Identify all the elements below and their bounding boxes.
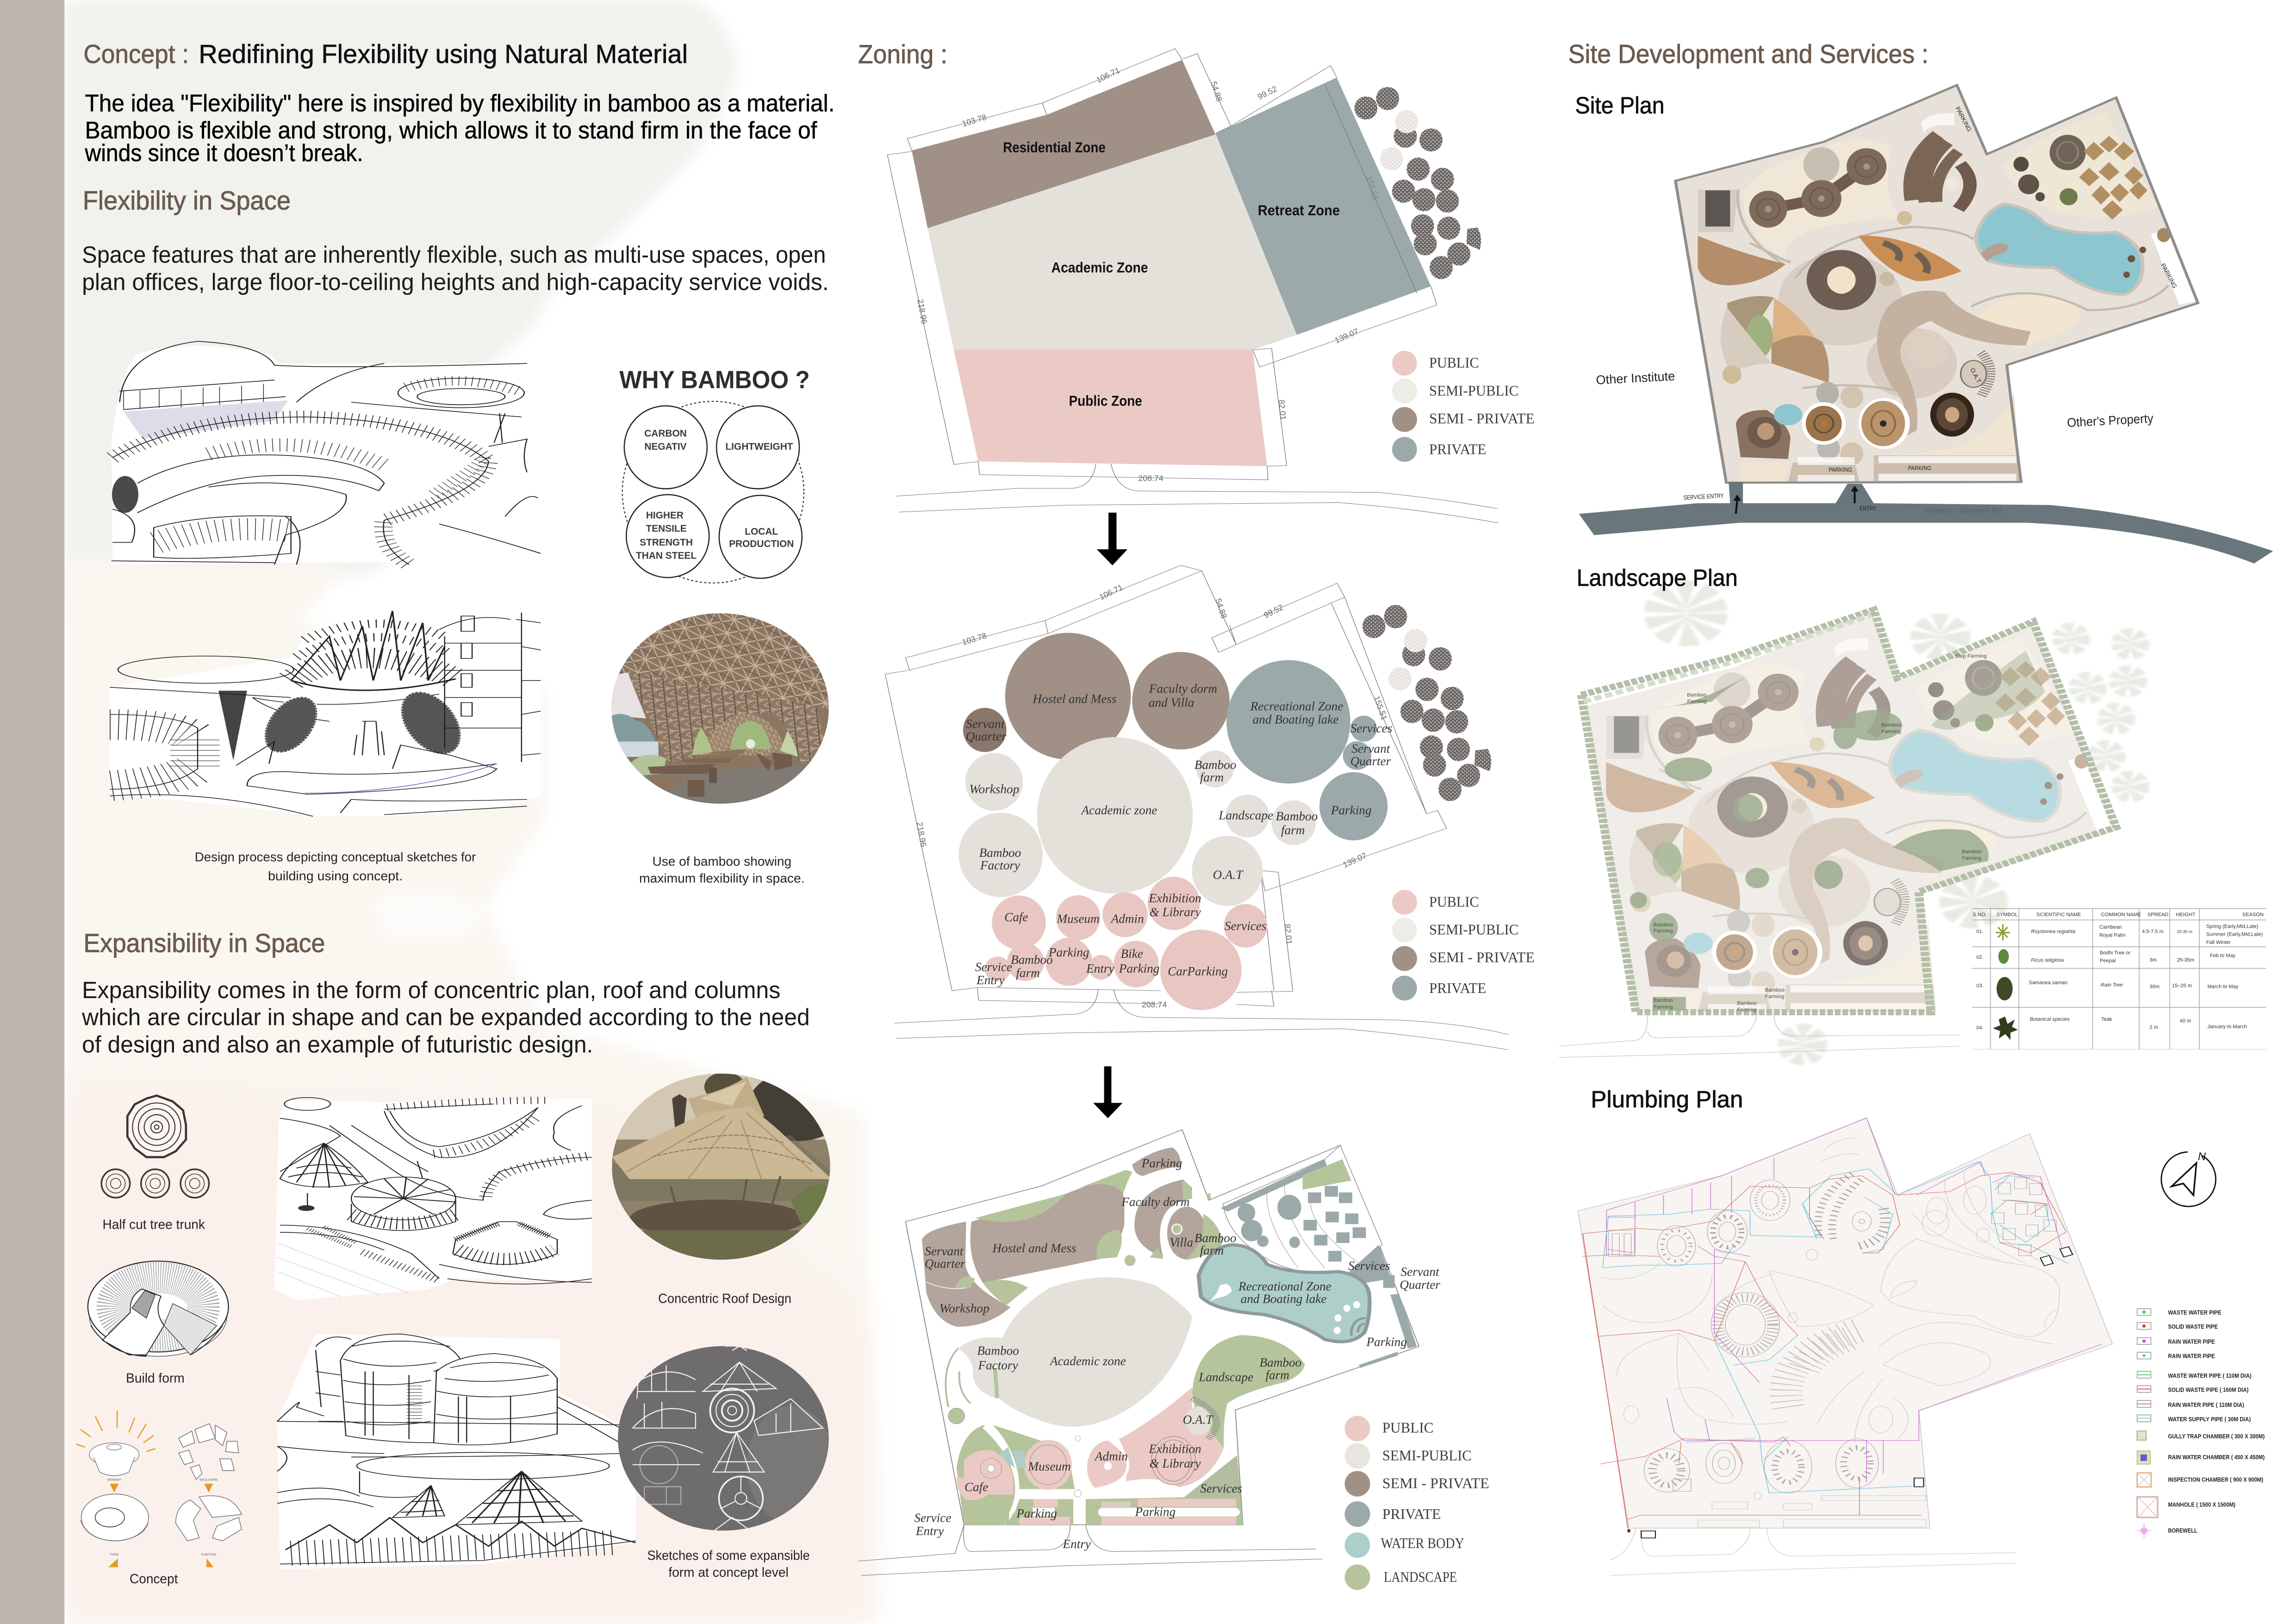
table: plant schedule: SEASON	[2242, 912, 2264, 918]
zoning plan 3: layout: & Library	[1150, 1456, 1201, 1470]
zoning plan 3: layout: Hostel and Mess	[992, 1241, 1076, 1255]
table: plant schedule: 04.	[1976, 1025, 1984, 1031]
legend: zoning 1	[1392, 351, 1535, 462]
zoning plan 3: layout: farm	[1200, 1243, 1224, 1257]
diagram: concept derivation: FUNCTION	[201, 1553, 217, 1556]
caption: concentric roof: Concentric Roof Design	[658, 1291, 791, 1306]
table: plant schedule: 25-35m	[2177, 957, 2194, 963]
table: plant schedule: 2 m	[2150, 1025, 2158, 1031]
zoning plan 2: bubble diagram: Parking	[1119, 962, 1159, 975]
zoning plan 3: layout: Services	[1348, 1259, 1390, 1273]
legend: plumbing: WASTE WATER PIPE	[2168, 1310, 2221, 1316]
text block: space features	[82, 242, 829, 295]
table: plant schedule: 01.	[1976, 929, 1984, 934]
text block: expansibility: which are circular in shape and can be expanded according to the need	[81, 1004, 810, 1031]
zoning plan 2: bubble diagram: 139.07	[1341, 851, 1368, 869]
text block: flexibility idea: The idea "Flexibility" here is inspired by flexibility in bamboo as a material.	[85, 90, 834, 117]
zoning plan 2: bubble diagram: Academic zone	[1081, 803, 1157, 817]
landscape plan: Farming	[1654, 1004, 1673, 1010]
legend: zoning 3: SEMI - PRIVATE	[1382, 1475, 1489, 1492]
table: plant schedule: SCIENTIFIC NAME	[2036, 912, 2081, 918]
heading: why bamboo: WHY BAMBOO ?	[619, 366, 810, 394]
heading: expansibility in space: Expansibility in Space	[83, 929, 325, 958]
zoning plan 2: bubble diagram: farm	[1016, 966, 1040, 980]
table: plant schedule: Samanea saman	[2029, 980, 2067, 986]
zoning plan 2: bubble diagram: CarParking	[1168, 964, 1228, 978]
table: plant schedule: Bodhi Tree or	[2100, 950, 2131, 956]
legend: plumbing: BOREWELL	[2168, 1528, 2197, 1534]
zoning plan 3: layout: Academic zone	[1049, 1354, 1126, 1368]
legend: zoning 2: PUBLIC	[1429, 893, 1479, 910]
zoning plan 2: bubble diagram: Bamboo	[1011, 953, 1053, 967]
landscape plan: Bamboo	[1687, 692, 1707, 698]
table: plant schedule: 40 m	[2180, 1018, 2191, 1024]
icon: ficus symbol	[1998, 949, 2009, 964]
heading: concept: Redifining Flexibility using Natural Material	[199, 39, 688, 69]
caption: build form: Build form	[126, 1371, 185, 1386]
table: plant schedule: 20-30 m	[2177, 929, 2192, 934]
zoning plan 2: bubble diagram: Workshop	[969, 782, 1019, 796]
zoning plan 2: bubble diagram: 99.52	[1262, 602, 1285, 620]
zoning plan 1: zones: 155.51	[1364, 175, 1381, 201]
text block: space features: plan offices, large floor-to-ceiling heights and high-capacity service voids.	[82, 269, 829, 295]
caption: trunk: Half cut tree trunk	[102, 1218, 205, 1232]
table: plant schedule: Royal Palm	[2099, 932, 2126, 938]
sketch: concentric roofs overview	[274, 1098, 592, 1300]
zoning plan 3: layout: Landscape	[1198, 1370, 1253, 1384]
landscape plan: Farming	[1687, 699, 1706, 705]
landscape plan: Farming	[1654, 928, 1673, 934]
landscape plan: Bamboo	[1737, 1000, 1757, 1006]
legend: zoning 3: LANDSCAPE	[1384, 1569, 1457, 1585]
zoning plan 1: zones	[887, 49, 1498, 523]
label: other institute: Other Institute	[1596, 369, 1675, 387]
site plan: ENTRY	[1860, 505, 1877, 512]
table: plant schedule: Fall Winter	[2206, 940, 2231, 945]
landscape plan: Step Farming	[1955, 654, 1987, 659]
diagram: concept derivation: ENCLOSURE	[199, 1479, 218, 1482]
zoning plan 2: bubble diagram: Parking	[1048, 945, 1089, 959]
zoning plan 1: zones: Residential Zone	[1003, 139, 1106, 156]
caption: design process	[195, 849, 476, 883]
zoning plan 1: zones: 99.52	[1256, 84, 1278, 101]
zoning plan 3: layout: Service	[914, 1511, 951, 1524]
zoning plan 3: layout: Museum	[1028, 1460, 1071, 1474]
diagram: why bamboo circles: CARBON	[644, 428, 687, 439]
zoning plan 3: layout	[858, 1130, 1440, 1575]
legend: zoning 2: SEMI-PUBLIC	[1429, 922, 1518, 938]
zoning plan 1: zones: 139.07	[1333, 326, 1360, 345]
zoning plan 2: bubble diagram: Hostel and Mess	[1032, 692, 1117, 706]
zoning plan 2: bubble diagram: 54.88	[1213, 597, 1229, 620]
zoning plan 3: layout: Recreational Zone	[1238, 1279, 1332, 1293]
zoning plan 2: bubble diagram	[885, 565, 1508, 1050]
zoning plan 2: bubble diagram: Recreational Zone	[1250, 700, 1343, 713]
zoning plan 2: bubble diagram: Admin	[1110, 912, 1144, 925]
text block: space features: Space features that are inherently flexible, such as multi-use spaces, open	[82, 242, 826, 268]
zoning plan 3: layout: Workshop	[940, 1301, 989, 1315]
zoning plan 2: bubble diagram: Exhibition	[1148, 891, 1201, 905]
table: plant schedule: SYMBOL	[1997, 912, 2018, 918]
legend: plumbing: RAIN WATER PIPE	[2168, 1339, 2215, 1345]
table: plant schedule: HEIGHT	[2176, 912, 2196, 918]
site plan: Goalpara - Guwahati Rd	[1923, 506, 2002, 514]
diagram: concept derivation: GRANARY	[107, 1479, 122, 1482]
site plan: PARKING	[1829, 466, 1852, 473]
table: plant schedule: Peepal	[2100, 958, 2116, 964]
text block: expansibility: Expansibility comes in the form of concentric plan, roof and columns	[82, 977, 780, 1003]
icon: teak symbol	[1993, 1017, 2018, 1040]
diagram: why bamboo circles: LOCAL	[745, 526, 778, 537]
icon: north compass	[2161, 1149, 2216, 1206]
zoning plan 3: layout: O.A.T	[1183, 1412, 1213, 1426]
caption: sketches	[647, 1549, 810, 1580]
zoning plan 2: bubble diagram: 106.71	[1098, 582, 1124, 602]
text block: flexibility idea	[85, 90, 834, 167]
zoning plan 3: layout: farm	[1266, 1368, 1289, 1382]
table: plant schedule: S.NO.	[1972, 912, 1987, 918]
table: plant schedule: Teak	[2101, 1017, 2112, 1022]
text block: expansibility: of design and also an example of futuristic design.	[82, 1031, 593, 1058]
heading: flexibility in space: Flexibility in Space	[83, 186, 291, 215]
landscape plan: Farming	[1765, 994, 1785, 999]
legend: zoning 2: SEMI - PRIVATE	[1429, 949, 1535, 966]
caption: sketches: form at concept level	[668, 1565, 789, 1580]
zoning plan 3: layout: Admin	[1094, 1449, 1128, 1463]
heading: concept: Concept :	[83, 39, 189, 69]
zoning plan 3: layout: Faculty dorm	[1121, 1195, 1190, 1209]
zoning plan 2: bubble diagram: Servant	[966, 717, 1005, 731]
zoning plan 3: layout: Parking	[1016, 1506, 1057, 1520]
legend: plumbing: WASTE WATER PIPE ( 110M DIA)	[2168, 1373, 2252, 1379]
heading: landscape plan: Landscape Plan	[1577, 565, 1738, 591]
zoning plan 3: layout: Parking	[1135, 1505, 1176, 1519]
zoning plan 2: bubble diagram: 208.74	[1142, 1000, 1167, 1009]
zoning plan 3: layout: Bamboo	[1195, 1231, 1236, 1245]
zoning plan 3: layout: Cafe	[964, 1480, 988, 1494]
sketch: curved fenced terraces	[112, 341, 541, 564]
zoning plan 2: bubble diagram: Services	[1225, 919, 1267, 933]
site plan: PARKING	[1908, 465, 1931, 472]
zoning plan 2: bubble diagram: Service	[975, 960, 1012, 974]
zoning plan 2: bubble diagram: and Boating lake	[1253, 712, 1338, 726]
zoning plan 1: zones: Retreat Zone	[1258, 202, 1340, 219]
zoning plan 2: bubble diagram: Entry	[976, 973, 1005, 987]
text block: expansibility	[81, 977, 810, 1058]
label: others property: Other's Property	[2066, 411, 2154, 430]
table: plant schedule: Summer (Early,Mid,Late)	[2206, 932, 2263, 937]
table: plant schedule: COMMON NAME	[2101, 912, 2141, 918]
zoning plan 2: bubble diagram: Quarter	[1350, 754, 1391, 768]
zoning plan 1: zones: Public Zone	[1069, 392, 1142, 409]
caption: sketches: Sketches of some expansible	[647, 1549, 810, 1563]
diagram: concept derivation	[76, 1411, 242, 1567]
zoning plan 3: layout: Factory	[977, 1358, 1018, 1372]
zoning plan 2: bubble diagram: 103.78	[961, 631, 988, 647]
icon: build form roof	[88, 1261, 229, 1356]
photo: bamboo canopy	[611, 613, 829, 804]
zoning plan 2: bubble diagram: Parking	[1331, 803, 1371, 817]
zoning plan 1: zones: 54.88	[1209, 80, 1224, 103]
zoning plan 2: bubble diagram: Bamboo	[1276, 809, 1318, 823]
table: plant schedule: 15–25 m	[2172, 983, 2192, 988]
zoning plan 1: zones: 103.78	[961, 112, 988, 129]
legend: zoning 1: SEMI-PUBLIC	[1429, 382, 1518, 399]
diagram: why bamboo circles: HIGHER	[646, 510, 684, 521]
zoning plan 2: bubble diagram: Servant	[1351, 742, 1391, 756]
legend: plumbing: WATER SUPPLY PIPE ( 30M DIA)	[2168, 1416, 2251, 1423]
zoning plan 3: layout: Exhibition	[1148, 1442, 1201, 1456]
zoning plan 2: bubble diagram: O.A.T	[1213, 868, 1244, 881]
sketch: bamboo lattice canopy	[110, 611, 541, 816]
legend: plumbing: SOLID WASTE PIPE	[2168, 1324, 2218, 1330]
table: plant schedule: Spring (Early,Mid,Late)	[2206, 924, 2258, 929]
zoning plan 3: layout: Parking	[1141, 1156, 1182, 1170]
text block: flexibility idea: winds since it doesn’t break.	[85, 140, 363, 167]
zoning plan 2: bubble diagram: 218.96	[915, 821, 928, 848]
site plan: O.A.T	[1969, 367, 1983, 384]
table: plant schedule: Roystonea regiahta	[2031, 929, 2075, 934]
landscape plan: Bamboo	[1881, 722, 1901, 728]
site plan: SERVICE ENTRY	[1683, 492, 1724, 501]
zoning plan 2: bubble diagram: farm	[1200, 770, 1224, 784]
zoning plan 2: bubble diagram: and Villa	[1149, 696, 1194, 710]
caption: bamboo use	[639, 854, 805, 885]
zoning plan 3: layout: Bamboo	[977, 1344, 1019, 1358]
caption: design process: building using concept.	[268, 869, 403, 883]
diagram: why bamboo circles: THAN STEEL	[636, 550, 697, 561]
diagram: why bamboo circles: LIGHTWEIGHT	[725, 441, 793, 452]
legend: plumbing	[2137, 1309, 2265, 1538]
plumbing plan	[1578, 1118, 2112, 1575]
legend: plumbing: RAIN WATER PIPE	[2168, 1353, 2215, 1360]
table: plant schedule: Feb to May	[2210, 953, 2236, 958]
zoning plan 3: layout: Quarter	[925, 1256, 965, 1270]
zoning plan 3: layout: Entry	[915, 1524, 944, 1538]
legend: plumbing: RAIN WATER CHAMBER ( 450 X 450M)	[2168, 1454, 2265, 1461]
legend: zoning 3: PUBLIC	[1382, 1419, 1433, 1436]
zoning plan 2: bubble diagram: 82.01	[1283, 924, 1294, 945]
legend: zoning 2: PRIVATE	[1429, 980, 1486, 996]
text block: flexibility idea: Bamboo is flexible and strong, which allows it to stand firm in the face of	[85, 117, 817, 144]
caption: bamboo use: maximum flexibility in space.	[639, 871, 805, 885]
site plan	[1579, 85, 2273, 563]
landscape plan: Bamboo	[1653, 998, 1673, 1003]
heading: plumbing plan: Plumbing Plan	[1591, 1086, 1743, 1112]
legend: zoning 3: WATER BODY	[1381, 1535, 1464, 1551]
legend: plumbing: INSPECTION CHAMBER ( 900 X 900M)	[2168, 1476, 2263, 1483]
legend: zoning 1: PUBLIC	[1429, 355, 1479, 371]
icon: half cut tree trunk	[101, 1096, 209, 1198]
table: plant schedule: Rain Tree	[2101, 982, 2123, 988]
zoning plan 3: layout: Services	[1200, 1481, 1242, 1495]
table: plant schedule: 3m	[2150, 957, 2157, 963]
site plan: PARKING	[1954, 106, 1973, 133]
photo: concept sketches chalkboard	[615, 1344, 834, 1535]
arrow: zones to bubbles	[1097, 512, 1127, 565]
table: plant schedule: Carribean	[2099, 924, 2122, 930]
site plan: PARKING	[2159, 262, 2178, 289]
side band	[0, 0, 64, 1624]
zoning plan 3: layout: Quarter	[1400, 1278, 1440, 1292]
zoning plan 3: layout: Parking	[1366, 1335, 1407, 1349]
diagram: why bamboo circles: NEGATIV	[644, 441, 687, 452]
legend: zoning 1: SEMI - PRIVATE	[1429, 410, 1535, 426]
zoning plan 1: zones: 218.96	[915, 298, 929, 325]
zoning plan 3: layout: Entry	[1063, 1537, 1091, 1551]
zoning plan 2: bubble diagram: Landscape	[1218, 808, 1273, 822]
heading: site plan: Site Plan	[1575, 92, 1664, 119]
landscape plan	[1559, 594, 2140, 1057]
zoning plan 1: zones: 208.74	[1138, 474, 1164, 483]
legend: zoning 1: PRIVATE	[1429, 441, 1486, 457]
zoning plan 2: bubble diagram: Museum	[1057, 912, 1100, 925]
sketch: cylindrical hostels and conical roofs	[277, 1334, 636, 1569]
table: plant schedule: 30m	[2150, 984, 2159, 989]
legend: zoning 3	[1344, 1416, 1489, 1590]
table: plant schedule: 03.	[1976, 983, 1984, 988]
diagram: why bamboo circles: PRODUCTION	[729, 539, 794, 550]
landscape plan: Bamboo	[1765, 987, 1785, 993]
table: plant schedule: March to May	[2208, 984, 2239, 989]
diagram: why bamboo circles: STRENGTH	[640, 537, 693, 548]
zoning plan 1: zones: Academic Zone	[1052, 259, 1148, 275]
legend: plumbing: RAIN WATER PIPE ( 110M DIA)	[2168, 1402, 2244, 1408]
legend: plumbing: GULLY TRAP CHAMBER ( 300 X 300M)	[2168, 1433, 2265, 1440]
icon: north compass: N	[2198, 1151, 2206, 1163]
zoning plan 2: bubble diagram: Bike	[1121, 947, 1143, 961]
table: plant schedule: 02.	[1976, 955, 1984, 960]
caption: design process: Design process depicting conceptual sketches for	[195, 849, 476, 864]
icon: rain tree symbol	[1997, 977, 2013, 1000]
zoning plan 2: bubble diagram: Cafe	[1004, 910, 1028, 924]
zoning plan 3: layout: Villa	[1170, 1235, 1193, 1249]
diagram: why bamboo circles: TENSILE	[646, 524, 687, 534]
table: plant schedule: Botanical species	[2030, 1017, 2070, 1022]
icon: palm symbol	[1996, 924, 2010, 940]
table: plant schedule: Ficus religiosa	[2031, 958, 2064, 963]
arrow: bubbles to layout	[1093, 1066, 1122, 1118]
zoning plan 2: bubble diagram: Faculty dorm	[1149, 682, 1217, 696]
zoning plan 2: bubble diagram: & Library	[1150, 905, 1201, 919]
zoning plan 1: zones: 82.01	[1277, 399, 1288, 420]
heading: site development: Site Development and Services :	[1568, 39, 1929, 69]
zoning plan 2: bubble diagram: Services	[1350, 721, 1392, 735]
caption: concept: Concept	[130, 1572, 178, 1587]
table: plant schedule: 4.5-7.5 m	[2142, 929, 2164, 934]
legend: zoning 2	[1392, 890, 1535, 1000]
caption: bamboo use: Use of bamboo showing	[653, 854, 791, 868]
legend: zoning 3: PRIVATE	[1382, 1506, 1441, 1522]
zoning plan 2: bubble diagram: Bamboo	[979, 846, 1021, 860]
zoning plan 3: layout: Bamboo	[1260, 1355, 1301, 1369]
landscape plan: Bamboo	[1653, 922, 1673, 928]
zoning plan 2: bubble diagram: farm	[1281, 823, 1305, 837]
table: plant schedule: January to March	[2208, 1024, 2247, 1030]
zoning plan 2: bubble diagram: Quarter	[966, 729, 1007, 743]
table: plant schedule: SPREAD	[2147, 912, 2168, 918]
zoning plan 2: bubble diagram: 155.51	[1372, 694, 1389, 721]
zoning plan 2: bubble diagram: Bamboo	[1195, 758, 1236, 772]
diagram: concept derivation: FORM	[110, 1553, 118, 1556]
landscape plan: Farming	[1962, 856, 1981, 861]
legend: plumbing: SOLID WASTE PIPE ( 160M DIA)	[2168, 1387, 2248, 1393]
zoning plan 3: layout: and Boating lake	[1241, 1292, 1326, 1305]
table: plant schedule	[1972, 909, 2266, 1049]
heading: zoning: Zoning :	[858, 40, 947, 69]
zoning plan 2: bubble diagram: Entry	[1086, 962, 1114, 975]
photo: concentric roof	[612, 1074, 830, 1260]
zoning plan 3: layout: Servant	[1401, 1265, 1440, 1279]
landscape plan: Farming	[1882, 729, 1901, 735]
landscape plan: Bamboo	[1962, 849, 1981, 855]
legend: plumbing: MANHOLE ( 1500 X 1500M)	[2168, 1502, 2235, 1508]
legend: zoning 3: SEMI-PUBLIC	[1382, 1447, 1472, 1463]
landscape plan: Farming	[1737, 1007, 1756, 1013]
zoning plan 2: bubble diagram: Factory	[980, 858, 1020, 872]
zoning plan 1: zones: 106.71	[1095, 65, 1121, 85]
diagram: why bamboo circles	[622, 401, 804, 583]
zoning plan 3: layout: Servant	[925, 1244, 964, 1258]
